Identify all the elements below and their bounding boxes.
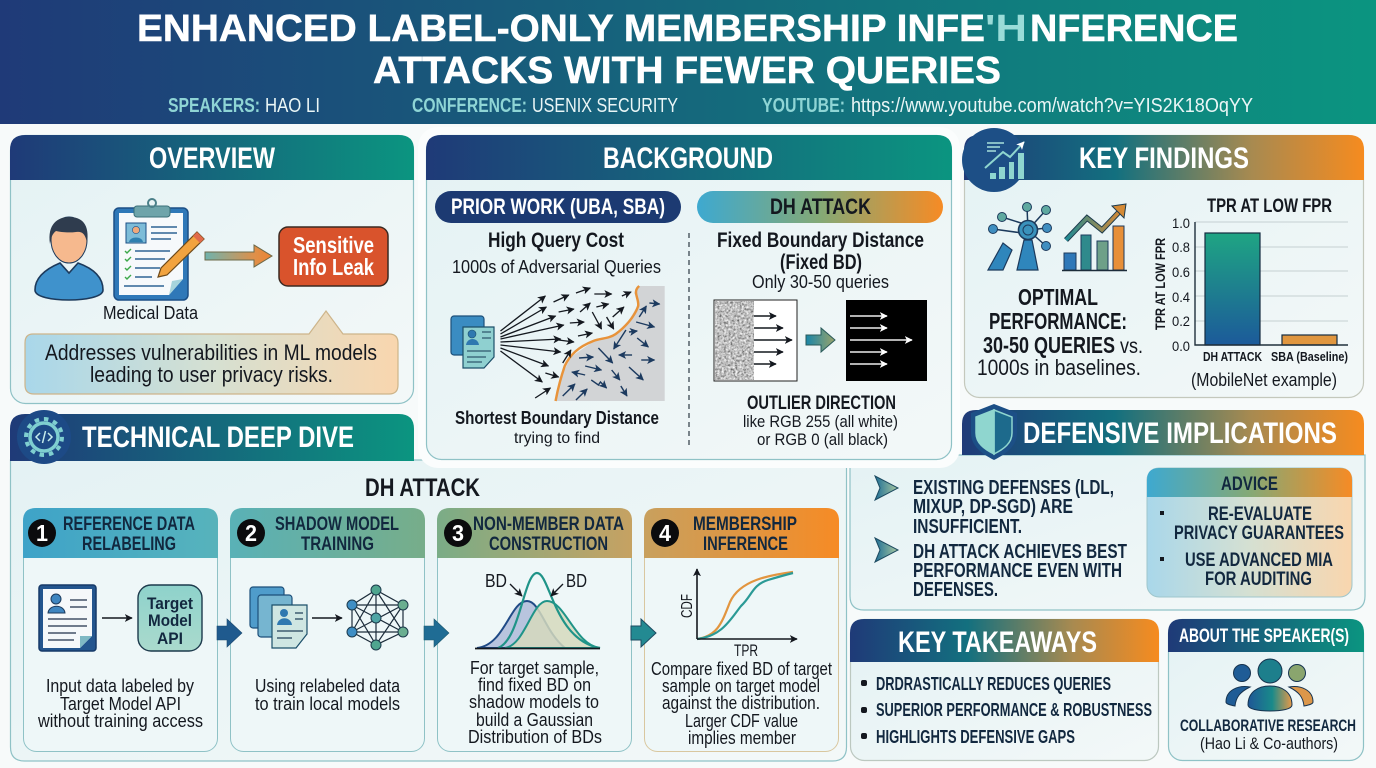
image: black sample with arrows bbox=[846, 300, 927, 381]
arrow: to network bbox=[312, 617, 342, 619]
label: medical data: Medical Data bbox=[103, 303, 199, 323]
takeaway one bbox=[861, 674, 1111, 694]
step 4 description: Larger CDF value bbox=[685, 711, 798, 731]
text: dh attack achieves: DH ATTACK ACHIEVES BEST bbox=[913, 541, 1127, 563]
step 1: reference data relabeling: RELABELING bbox=[82, 534, 176, 555]
step 1 description: Target Model API bbox=[60, 694, 181, 714]
step 3: non-member data construction: 3 bbox=[452, 520, 464, 546]
text: fixed boundary distance: Fixed Boundary Distance bbox=[717, 229, 924, 252]
text: high query cost: High Query Cost bbox=[488, 229, 624, 252]
text: shortest boundary distance: trying to find bbox=[514, 430, 600, 447]
bar chart: tpr at low fpr: TPR AT LOW FPR bbox=[1207, 196, 1332, 217]
text: optimal performance: PERFORMANCE: bbox=[989, 308, 1127, 334]
step 3: non-member data construction bbox=[437, 508, 632, 752]
step 1: reference data relabeling: 1 bbox=[36, 520, 48, 546]
step 4 description: against the distribution. bbox=[662, 693, 820, 713]
conference meta bbox=[412, 95, 678, 117]
conference meta: USENIX SECURITY bbox=[532, 95, 678, 117]
defensive implications content bbox=[875, 404, 1352, 601]
step 1 description: without training access bbox=[37, 711, 203, 731]
text: optimal performance: vs. bbox=[1120, 335, 1143, 358]
text: outlier direction bbox=[743, 393, 898, 449]
step 2: shadow model training bbox=[230, 508, 425, 752]
icon: code gear bbox=[17, 410, 71, 464]
arrow: step 1 to step 2 bbox=[217, 619, 242, 647]
speakers meta: HAO LI bbox=[265, 95, 320, 117]
arrow: step 2 to step 3 bbox=[424, 619, 449, 647]
callout: vulnerabilities: Addresses vulnerabilities in ML models bbox=[45, 340, 377, 365]
text: outlier direction: or RGB 0 (all black) bbox=[757, 430, 888, 449]
step 3 description: build a Gaussian bbox=[476, 710, 593, 730]
arrow: step 3 to step 4 bbox=[631, 619, 656, 647]
icon: three people bbox=[1226, 659, 1313, 711]
icon: growth circle bbox=[962, 128, 1026, 192]
pill: prior work bbox=[435, 191, 681, 223]
step 4 description: Compare fixed BD of target bbox=[651, 659, 832, 679]
heading: overview: OVERVIEW bbox=[149, 142, 276, 175]
box: advice: ADVICE bbox=[1221, 474, 1278, 495]
step 1 description: Input data labeled by bbox=[46, 676, 194, 696]
heading: key takeaways: KEY TAKEAWAYS bbox=[898, 626, 1097, 659]
icon: person bbox=[35, 217, 103, 300]
callout: vulnerabilities bbox=[25, 311, 398, 394]
step 4 description bbox=[651, 659, 832, 748]
icon: clipboard with pencil bbox=[114, 199, 204, 300]
bar chart: tpr at low fpr: 1.0 bbox=[1172, 215, 1190, 231]
takeaway two: SUPERIOR PERFORMANCE & ROBUSTNESS bbox=[876, 700, 1152, 720]
step 2 description bbox=[255, 676, 401, 714]
step 1: reference data relabeling: REFERENCE DATA bbox=[63, 514, 195, 535]
panel: technical deep dive bbox=[10, 410, 846, 761]
icon: rising bars bbox=[1062, 204, 1127, 270]
panel: key takeaways bbox=[850, 619, 1159, 760]
box: target model api: Target bbox=[147, 594, 193, 613]
callout: vulnerabilities: leading to user privacy risks. bbox=[90, 362, 333, 387]
bar chart: tpr at low fpr: 0.0 bbox=[1172, 338, 1190, 354]
step 2: shadow model training: TRAINING bbox=[301, 534, 374, 555]
title line one: ENHANCED LABEL-ONLY MEMBERSHIP INFE bbox=[137, 8, 985, 50]
arrow: noisy to outlier bbox=[806, 328, 835, 352]
text: shortest boundary distance bbox=[455, 408, 659, 447]
pill: prior work: PRIOR WORK (UBA, SBA) bbox=[451, 194, 665, 219]
text: dh attack achieves: DEFENSES. bbox=[913, 579, 998, 601]
chart: cdf curves bbox=[679, 569, 797, 660]
panel: background bbox=[418, 127, 960, 468]
text: fixed boundary distance bbox=[717, 229, 924, 292]
box: advice: RE-EVALUATE bbox=[1208, 504, 1312, 525]
caption: mobilenet example: (MobileNet example) bbox=[1191, 370, 1337, 390]
step 2 description: to train local models bbox=[255, 694, 400, 714]
icon: query documents bbox=[451, 316, 494, 368]
step 3: non-member data construction: CONSTRUCTION bbox=[489, 534, 608, 555]
bar chart: tpr at low fpr: 0.6 bbox=[1172, 264, 1190, 280]
text: high query cost: 1000s of Adversarial Queries bbox=[452, 257, 661, 277]
step 3 description: shadow models to bbox=[469, 692, 599, 712]
heading: technical deep dive: TECHNICAL DEEP DIVE bbox=[82, 421, 354, 454]
bar chart: tpr at low fpr: DH ATTACK bbox=[1203, 349, 1262, 364]
takeaway three bbox=[861, 727, 1075, 747]
title line one: 'H bbox=[985, 8, 1027, 50]
box: advice: USE ADVANCED MIA bbox=[1185, 550, 1333, 571]
step 2: shadow model training: SHADOW MODEL bbox=[275, 514, 399, 535]
panel: about the speakers bbox=[1168, 619, 1364, 760]
text: collaborative research: (Hao Li & Co-authors) bbox=[1200, 734, 1338, 753]
step 4: membership inference: 4 bbox=[659, 520, 671, 546]
panel: key findings bbox=[962, 128, 1364, 398]
bar chart: tpr at low fpr: SBA (Baseline) bbox=[1271, 349, 1348, 364]
box: advice: FOR AUDITING bbox=[1205, 569, 1312, 590]
icon: bullet arrow two bbox=[875, 538, 898, 562]
text: optimal performance: 1000s in baselines. bbox=[977, 355, 1141, 380]
youtube meta: YOUTUBE: bbox=[762, 95, 845, 117]
text: shortest boundary distance: Shortest Boundary Distance bbox=[455, 408, 659, 428]
icon: antenna hub bbox=[988, 202, 1052, 270]
text: optimal performance: 30-50 QUERIES bbox=[983, 332, 1115, 358]
title banner bbox=[0, 0, 1376, 124]
pill: dh attack bbox=[697, 191, 943, 223]
bar chart: tpr at low fpr: 0.8 bbox=[1172, 239, 1190, 255]
step 3 description: For target sample, bbox=[470, 658, 599, 678]
bar chart: tpr at low fpr bbox=[1152, 196, 1348, 364]
box: sensitive info leak: Info Leak bbox=[293, 254, 374, 280]
icon: stacked documents bbox=[250, 587, 307, 648]
step 3 description: Distribution of BDs bbox=[468, 727, 602, 747]
diagram: adversarial queries toward boundary bbox=[500, 286, 665, 401]
heading: background: BACKGROUND bbox=[603, 142, 773, 175]
text: outlier direction: OUTLIER DIRECTION bbox=[747, 393, 896, 414]
step 3: non-member data construction: NON-MEMBER DATA bbox=[473, 514, 624, 535]
box: advice bbox=[1147, 468, 1352, 597]
chart: gaussian distribution of BDs bbox=[475, 571, 600, 648]
panel: overview bbox=[10, 135, 414, 404]
heading: dh attack: DH ATTACK bbox=[365, 474, 480, 502]
image: noisy sample with arrows bbox=[714, 300, 797, 381]
box: sensitive info leak: Sensitive bbox=[293, 232, 374, 258]
icon: neural network bbox=[347, 585, 408, 650]
conference meta: CONFERENCE: bbox=[412, 95, 527, 117]
step 4 description: implies member bbox=[688, 728, 796, 748]
text: fixed boundary distance: (Fixed BD) bbox=[780, 251, 862, 274]
text: existing defenses: MIXUP, DP-SGD) ARE bbox=[913, 496, 1073, 518]
icon: shield bbox=[971, 404, 1017, 460]
takeaway three: HIGHLIGHTS DEFENSIVE GAPS bbox=[876, 727, 1075, 747]
takeaway two bbox=[861, 700, 1152, 720]
speakers meta: SPEAKERS: bbox=[168, 95, 260, 117]
youtube meta: https://www.youtube.com/watch?v=YIS2K18OqYY bbox=[851, 95, 1253, 117]
box: target model api: API bbox=[157, 629, 183, 648]
step 4: membership inference: MEMBERSHIP bbox=[693, 514, 797, 535]
box: target model api bbox=[138, 585, 202, 651]
icon: data document bbox=[39, 585, 96, 651]
box: target model api: Model bbox=[148, 611, 192, 630]
step 2 description: Using relabeled data bbox=[255, 676, 401, 696]
icon: bullet arrow one bbox=[875, 476, 898, 500]
text: existing defenses bbox=[913, 477, 1114, 538]
step 4: membership inference: INFERENCE bbox=[703, 534, 788, 555]
text: collaborative research bbox=[1180, 716, 1356, 753]
title line two: ATTACKS WITH FEWER QUERIES bbox=[373, 50, 1001, 92]
arrow: to target api bbox=[102, 617, 132, 619]
text: optimal performance: OPTIMAL bbox=[1018, 284, 1098, 310]
divider bbox=[688, 233, 690, 447]
heading: key findings: KEY FINDINGS bbox=[1079, 142, 1249, 175]
step 2: shadow model training: 2 bbox=[245, 520, 257, 546]
panel: defensive implications bbox=[850, 410, 1365, 610]
text: outlier direction: like RGB 255 (all white) bbox=[743, 412, 898, 431]
pill: dh attack: DH ATTACK bbox=[770, 194, 871, 219]
bar chart: tpr at low fpr: 0.4 bbox=[1172, 289, 1190, 305]
text: existing defenses: EXISTING DEFENSES (LDL, bbox=[913, 477, 1114, 499]
step 1 description bbox=[37, 676, 203, 731]
text: existing defenses: INSUFFICIENT. bbox=[913, 516, 1022, 538]
bar chart: tpr at low fpr: 0.2 bbox=[1172, 313, 1190, 329]
chart: cdf curves: CDF bbox=[679, 594, 696, 618]
box: sensitive info leak bbox=[279, 227, 388, 286]
text: dh attack achieves bbox=[913, 541, 1127, 601]
step 3 description: find fixed BD on bbox=[478, 675, 591, 695]
title line one: NFERENCE bbox=[1030, 8, 1238, 50]
bar chart: tpr at low fpr: TPR AT LOW FPR bbox=[1152, 238, 1168, 330]
arrow: data to leak bbox=[205, 245, 272, 267]
text: optimal performance bbox=[977, 284, 1143, 380]
step 4: membership inference bbox=[644, 508, 839, 752]
text: fixed boundary distance: Only 30-50 queries bbox=[752, 272, 889, 292]
chart: gaussian distribution of BDs: BD bbox=[485, 571, 507, 591]
chart: cdf curves: TPR bbox=[734, 641, 758, 660]
text: dh attack achieves: PERFORMANCE EVEN WITH bbox=[913, 560, 1122, 582]
step 3 description bbox=[468, 658, 602, 747]
takeaway one: DRDRASTICALLY REDUCES QUERIES bbox=[876, 674, 1111, 694]
step 4 description: sample on target model bbox=[662, 676, 820, 696]
step 1: reference data relabeling bbox=[23, 508, 218, 752]
chart: gaussian distribution of BDs: BD bbox=[566, 571, 587, 591]
text: high query cost bbox=[452, 229, 661, 277]
